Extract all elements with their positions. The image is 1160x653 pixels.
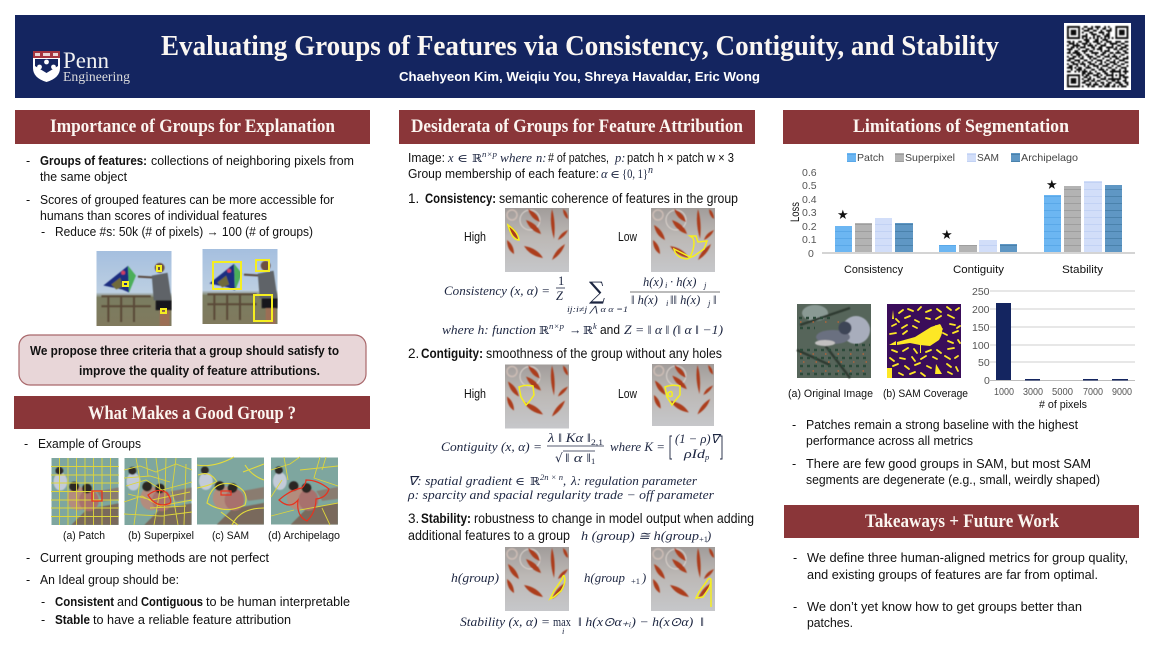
example: low contiguity: Low — [618, 387, 638, 401]
heading: stability — [408, 511, 754, 544]
formula: stability: i — [562, 626, 565, 636]
formula note: function h: and — [600, 323, 620, 337]
image: archipelago grouping — [271, 457, 338, 525]
image: SAM grouping — [197, 457, 264, 525]
heading: stability: h (group) ≅ h(group — [581, 529, 699, 543]
formula: consistency: ‖ h(x) — [631, 293, 658, 307]
panel: importance of groups — [15, 110, 370, 326]
text: notation: Image: — [408, 151, 445, 165]
bullets: ideal group — [26, 551, 350, 627]
heading: contiguity: smoothness of the group without any holes — [486, 346, 722, 361]
star markers: ★ — [1046, 178, 1058, 193]
heading: contiguity: Contiguity: — [421, 346, 483, 361]
heading: stability: robustness to change in model output when adding — [474, 511, 754, 526]
bullets: group definition: humans than scores of individual features — [40, 209, 267, 223]
text: notation: # of patches, — [548, 151, 609, 165]
formula note: contiguity parameters: , — [563, 474, 566, 488]
heading: takeaways — [784, 505, 1139, 538]
image: kite with group boxes — [202, 249, 278, 324]
example: stability group — [451, 547, 569, 611]
x axis labels — [844, 264, 1104, 276]
heading: importance of groups — [15, 110, 370, 144]
histogram x axis: 9000 — [1112, 386, 1132, 398]
example: stability group plus one: ) — [641, 571, 646, 585]
formula note: contiguity parameters: ρ: sparcity and spacial regularity trade − off parameter — [407, 488, 714, 502]
y axis labels: 0.3 — [802, 207, 817, 219]
formula: stability: ‖ h(x⊙α₊ᵢ) − h(x⊙α) ‖ — [578, 615, 704, 629]
Penn Engineering logo — [33, 48, 130, 85]
formula: contiguity: where K = — [610, 440, 665, 454]
heading: what makes a good group — [14, 396, 370, 429]
heading: contiguity: 2. — [408, 346, 419, 361]
text: notation: ∈ — [610, 168, 620, 181]
formula: stability: max — [553, 615, 572, 629]
panel: limitations of segmentation — [783, 110, 1139, 487]
text: notation: {0, 1} — [622, 167, 648, 181]
callout: three criteria: improve the quality of feature attributions. — [79, 364, 320, 378]
star markers: ★ — [941, 228, 953, 243]
formula note: contiguity parameters — [407, 472, 714, 502]
formula: consistency: ∑ — [589, 277, 605, 305]
example: low consistency — [618, 208, 715, 272]
heading: consistency: Consistency: — [425, 191, 496, 206]
bullets: takeaways: We define three human-aligned metrics for group quality, — [807, 551, 1128, 565]
bars: consistency — [835, 218, 913, 253]
image: original bird — [797, 304, 871, 378]
chart legend: Archipelago — [1021, 152, 1078, 164]
heading: stability: +1 — [699, 534, 708, 544]
bullets: group definition: Groups of features: — [40, 154, 147, 168]
histogram y axis: 0 — [984, 375, 990, 387]
formula: contiguity: Contiguity (x, α) = — [441, 440, 542, 454]
callout: three criteria: We propose three criteria that a group should satisfy to — [30, 344, 339, 358]
formula note: function h: ℝ — [583, 324, 594, 337]
bullets: ideal group: to be human interpretable — [206, 595, 350, 609]
bullets: group definition: the same object — [40, 170, 128, 184]
text: notation: Group membership of each feature: — [408, 167, 599, 181]
formula: consistency: j — [703, 280, 707, 290]
heading: takeaways: Takeaways + Future Work — [865, 511, 1059, 532]
bullets: limitations findings: There are few good groups in SAM, but most SAM — [806, 457, 1091, 471]
bullets: limitations findings: - — [792, 418, 796, 432]
bullets: limitations findings — [792, 418, 1100, 487]
example: stability group plus one — [584, 547, 715, 611]
example: high contiguity: High — [464, 387, 486, 401]
heading: stability: ) — [706, 529, 711, 543]
histogram x axis: 3000 — [1023, 386, 1043, 398]
Penn Engineering logo: Engineering — [63, 70, 130, 85]
y axis labels: Loss — [788, 202, 802, 222]
x axis labels: Contiguity — [953, 264, 1005, 276]
panel: takeaways and future work — [784, 505, 1139, 630]
Penn Engineering logo: Penn — [63, 48, 110, 73]
example: stability group plus one: h(group — [584, 571, 625, 585]
captions: bird images: (a) Original Image — [788, 388, 873, 400]
formula note: function h: k — [593, 321, 597, 331]
bullets: group definition: - — [26, 193, 30, 207]
formula note: contiguity parameters: ∈ — [515, 475, 525, 488]
authors: Chaehyeon Kim, Weiqiu You, Shreya Havaldar, Eric Wong — [399, 69, 760, 84]
bullets: ideal group: - — [26, 551, 30, 565]
y axis labels: 0.2 — [802, 221, 817, 233]
formula note: function h: Z = ‖ α ‖ (‖ α ‖ −1) — [624, 323, 723, 337]
heading: limitations: Limitations of Segmentation — [853, 116, 1069, 137]
bullets: group definition: Reduce #s: 50k (# of pixels) → 100 (# of groups) — [55, 225, 313, 239]
histogram x axis: 1000 — [994, 386, 1014, 398]
bullets: takeaways: and existing groups of features are far from optimal. — [807, 568, 1098, 582]
formula note: function h: → — [569, 323, 582, 337]
formula: stability: Stability (x, α) = — [460, 615, 550, 629]
star markers — [837, 178, 1058, 243]
formula note: contiguity parameters: 2n × n — [540, 472, 563, 482]
histogram x axis — [994, 386, 1132, 411]
text: notation: n×p — [482, 149, 497, 159]
formula note: contiguity parameters: ∇: spatial gradient — [408, 474, 513, 488]
bullets: ideal group: Contiguous — [141, 595, 203, 609]
header banner — [15, 15, 1145, 98]
bullets: takeaways: We don’t yet know how to get groups better than — [807, 600, 1082, 614]
heading: desiderata — [399, 110, 755, 144]
formula: contiguity: ρId — [683, 447, 706, 461]
formula: consistency: ‖‖ h(x) — [670, 293, 700, 307]
bullets: group definition: - — [41, 225, 45, 239]
formula: consistency: i — [665, 280, 668, 290]
bullets: limitations findings: segments are degenerate (e.g., small, weirdly shaped) — [806, 473, 1100, 487]
heading: what makes a good group: What Makes a Good Group ? — [88, 403, 296, 424]
text: notation: x — [447, 151, 454, 165]
formula: contiguity: 2,1 — [591, 437, 603, 447]
heading: importance of groups: Importance of Groups for Explanation — [50, 116, 335, 137]
formula: contiguity: p — [704, 452, 709, 462]
bullets: ideal group: - — [41, 613, 45, 627]
formula: contiguity: √ — [555, 451, 563, 465]
histogram x axis: 5000 — [1052, 386, 1073, 398]
bullets: takeaways: - — [793, 600, 797, 614]
formula note: contiguity parameters: ℝ — [530, 475, 541, 488]
star markers: ★ — [837, 208, 849, 223]
captions: grouping methods: (c) SAM — [212, 530, 249, 542]
image: patch grouping — [51, 458, 119, 525]
bullets: limitations findings: Patches remain a strong baseline with the highest — [806, 418, 1079, 432]
bullets: ideal group: to have a reliable feature attribution — [93, 613, 291, 627]
y axis labels: 0 — [808, 248, 814, 260]
bullets: ideal group: - — [26, 573, 30, 587]
formula: consistency: · h(x) — [670, 275, 696, 289]
histogram y axis: 100 — [972, 340, 990, 352]
example: stability group: h(group) — [451, 571, 499, 585]
heading: consistency — [408, 191, 738, 206]
chart legend: Superpixel — [905, 152, 955, 164]
chart legend: SAM — [977, 152, 999, 164]
bullets: group definition: collections of neighboring pixels from — [151, 154, 354, 168]
formula: consistency: 1 — [558, 274, 564, 288]
formula: consistency: j — [707, 298, 711, 308]
formula note: function h: where h: function — [442, 323, 536, 337]
histogram y axis: 200 — [972, 304, 990, 316]
title: Evaluating Groups of Features via Consistency, Contiguity, and Stability — [161, 31, 999, 62]
bullets: group definition: - — [26, 154, 30, 168]
captions: bird images: (b) SAM Coverage — [883, 388, 968, 400]
histogram x axis: # of pixels — [1039, 399, 1087, 411]
heading: stability: additional features to a group — [408, 528, 570, 543]
heading: stability: 3. — [408, 511, 419, 526]
heading: consistency: semantic coherence of features in the group — [499, 191, 738, 206]
bullets: ideal group: - — [41, 595, 45, 609]
bars: contiguity — [939, 240, 1017, 253]
captions: grouping methods: (b) Superpixel — [128, 530, 194, 542]
text: notation: patch h × patch w × 3 — [627, 151, 734, 165]
bullets: group definition — [26, 154, 354, 239]
panel: what makes a good group — [14, 396, 370, 627]
x axis labels: Stability — [1062, 264, 1104, 276]
chart legend: Patch — [857, 152, 884, 164]
text: notation: ∈ — [457, 152, 468, 165]
text: notation — [408, 149, 734, 181]
example: high consistency — [464, 208, 569, 272]
bullets: ideal group: Consistent — [55, 595, 115, 609]
text: notation: ℝ — [472, 152, 483, 165]
bars: stability — [1044, 181, 1122, 253]
captions: grouping methods: (d) Archipelago — [268, 530, 340, 542]
formula note: function h — [442, 321, 723, 337]
bullets: ideal group: Current grouping methods are not perfect — [40, 551, 270, 565]
bullets: ideal group: Stable — [55, 613, 90, 627]
text: notation: where — [500, 151, 532, 165]
histogram x axis: 7000 — [1083, 386, 1103, 398]
bullets: takeaways: patches. — [807, 616, 853, 630]
panel: desiderata — [399, 110, 755, 636]
formula: consistency: Z — [556, 289, 564, 303]
bullets: limitations findings: performance across all metrics — [806, 434, 973, 448]
y axis labels: 0.6 — [802, 167, 817, 179]
histogram y axis: 250 — [972, 286, 990, 298]
example: low contiguity — [618, 364, 714, 426]
QR code — [1064, 23, 1131, 90]
formula: contiguity: λ ‖ Kα ‖ — [547, 431, 591, 445]
image: SAM coverage — [887, 304, 961, 378]
example: high contiguity — [464, 364, 569, 428]
bullets: takeaways — [793, 551, 1128, 630]
formula: contiguity: (1 − ρ)∇ — [675, 432, 722, 446]
bullets: group definition: Scores of grouped features can be more accessible for — [40, 193, 334, 207]
captions: grouping methods: (a) Patch — [63, 530, 105, 542]
histogram y axis: 150 — [972, 322, 990, 334]
y axis labels: 0.4 — [802, 194, 817, 206]
histogram bars — [996, 303, 1128, 380]
formula: consistency: i — [666, 298, 669, 308]
heading: desiderata: Desiderata of Groups for Feature Attribution — [411, 116, 743, 137]
heading: consistency: 1. — [408, 191, 419, 206]
formula note: function h: n×p — [549, 321, 564, 331]
formula: consistency: ‖ — [713, 293, 717, 307]
example: high consistency: High — [464, 230, 486, 244]
text: notation: n: — [536, 151, 546, 165]
bar chart: segment size histogram — [972, 286, 1135, 411]
formula: stability — [460, 615, 704, 636]
text: notation: p: — [614, 151, 625, 165]
captions: bird images — [788, 388, 968, 400]
bullets: takeaways: - — [793, 551, 797, 565]
example: stability group plus one: +1 — [631, 576, 640, 586]
x axis labels: Consistency — [844, 264, 903, 276]
y axis labels: 0.5 — [802, 180, 817, 192]
callout: three criteria — [19, 335, 366, 385]
formula: consistency — [444, 274, 720, 314]
formula: consistency: h(x) — [643, 275, 663, 289]
image: superpixel grouping — [124, 458, 192, 525]
bar chart: loss by metric — [788, 152, 1135, 276]
histogram y axis: 50 — [978, 357, 990, 369]
histogram y axis — [972, 286, 990, 387]
bullets: ideal group: and — [117, 595, 138, 609]
text: example of groups: Example of Groups — [38, 437, 141, 451]
y axis labels — [788, 167, 817, 260]
captions: grouping methods — [63, 530, 340, 542]
bullets: ideal group: An Ideal group should be: — [40, 573, 179, 587]
formula: consistency: Consistency (x, α) = — [444, 284, 550, 298]
example: low consistency: Low — [618, 230, 638, 244]
heading: stability: Stability: — [421, 511, 471, 526]
image: kite with small feature boxes — [96, 251, 172, 326]
formula: contiguity — [441, 431, 722, 466]
bullets: limitations findings: - — [792, 457, 796, 471]
formula: consistency: ij:i≠j ⋀ α α =1 — [567, 304, 628, 314]
formula note: function h: ℝ — [539, 324, 550, 337]
formula: contiguity: 1 — [591, 456, 595, 466]
heading: limitations — [783, 110, 1139, 144]
chart legend — [847, 152, 1078, 164]
y axis labels: 0.1 — [802, 234, 817, 246]
formula: contiguity: ‖ α ‖ — [565, 451, 591, 465]
text: example of groups: - — [24, 437, 28, 451]
text: notation: α — [601, 167, 608, 181]
text: notation: n — [648, 165, 653, 176]
formula note: contiguity parameters: λ: regulation parameter — [570, 474, 697, 488]
